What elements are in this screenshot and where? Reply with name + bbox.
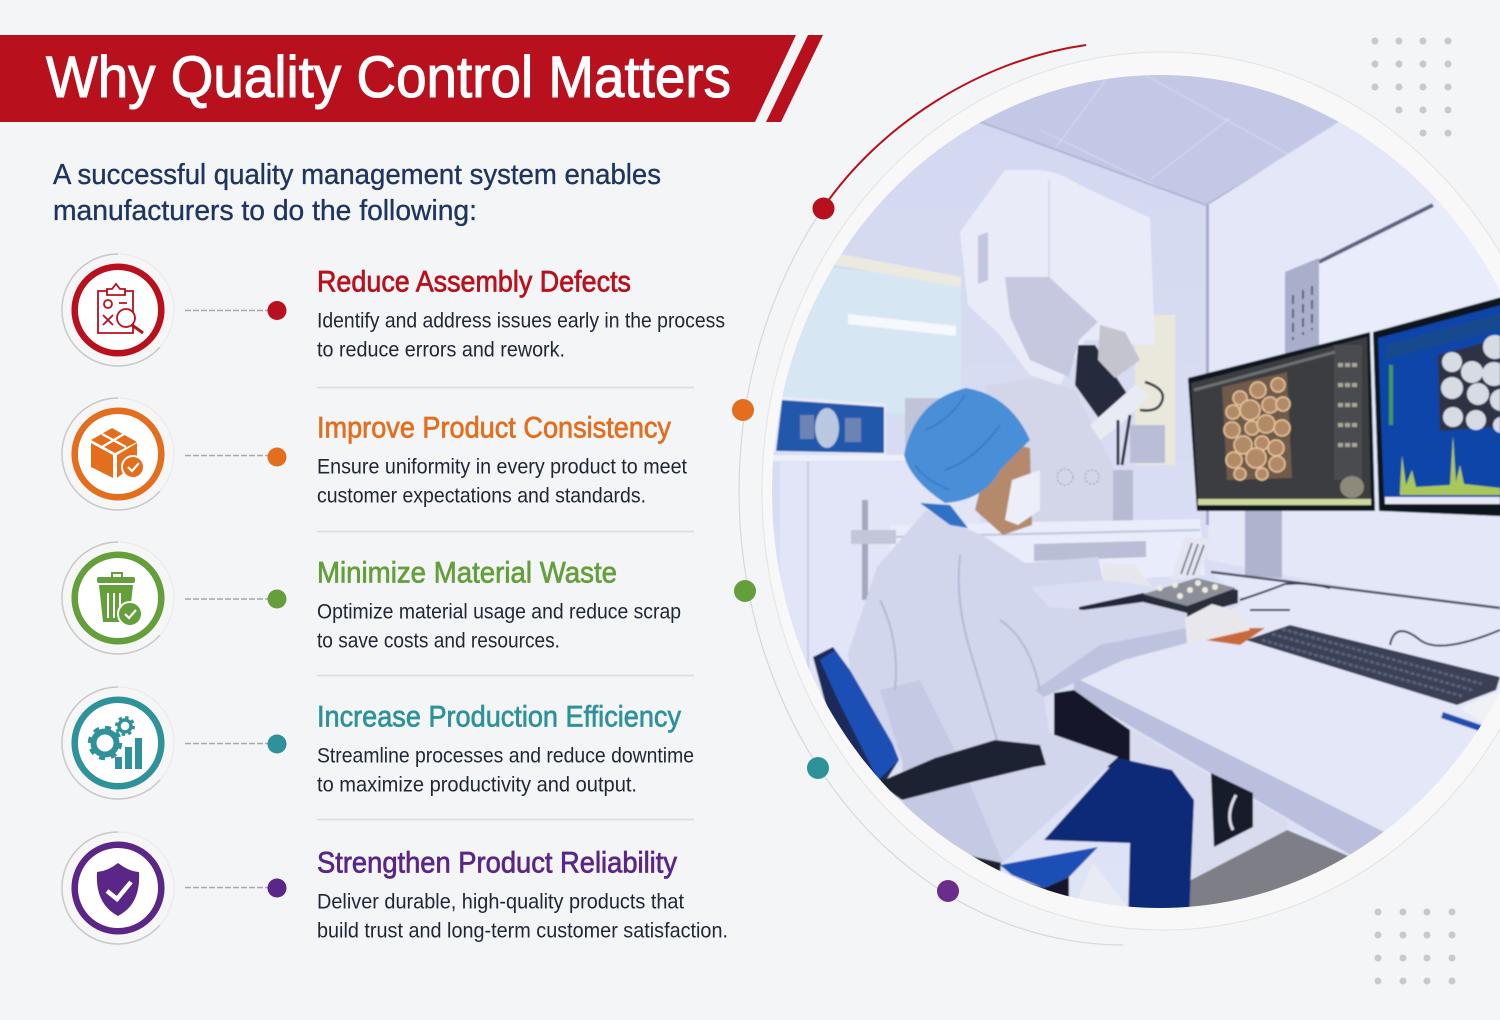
description: to maximize productivity and output. — [317, 774, 637, 796]
description — [317, 456, 687, 508]
description: Streamline processes and reduce downtime — [317, 744, 694, 768]
right wall — [1206, 118, 1500, 620]
heading: Improve Product Consistency — [317, 412, 671, 444]
item 4: increase production efficiency — [62, 687, 694, 799]
lab coat — [848, 510, 1187, 863]
intro text: manufacturers to do the following: — [53, 195, 477, 227]
technician — [848, 388, 1250, 920]
description — [317, 310, 725, 362]
header banner — [0, 35, 823, 122]
monitor: right screen — [1373, 292, 1500, 517]
connector — [185, 310, 270, 312]
timeline dot: green — [734, 580, 756, 602]
heading: Strengthen Product Reliability — [317, 846, 677, 880]
under-desk equipment — [1054, 690, 1351, 920]
heading: Reduce Assembly Defects — [317, 266, 631, 298]
armrest — [877, 740, 1046, 800]
tray and small keyboard — [1079, 578, 1265, 645]
red accent arc — [823, 45, 1086, 208]
trousers — [1044, 758, 1194, 920]
description: Optimize material usage and reduce scrap — [317, 600, 681, 624]
connector — [185, 742, 270, 744]
dot grid: bottom right — [1374, 908, 1456, 984]
icon: gears and bar chart — [62, 687, 174, 799]
desk — [1074, 572, 1500, 857]
connector — [185, 454, 270, 456]
item 2: improve product consistency — [62, 398, 687, 510]
photo: technician at electron microscope — [760, 60, 1500, 920]
icon: package with check — [62, 398, 174, 510]
microscope — [960, 170, 1163, 522]
description — [317, 890, 728, 942]
description — [317, 744, 694, 796]
item 5: strengthen product reliability — [62, 832, 728, 944]
intro text — [53, 159, 661, 227]
heading: Minimize Material Waste — [317, 556, 617, 590]
monitor stand — [1245, 505, 1282, 578]
heading: Increase Production Efficiency — [317, 700, 681, 734]
dot grid: top right — [1372, 38, 1452, 136]
description — [317, 600, 681, 652]
chair — [813, 647, 1098, 905]
decorative orbit rings — [739, 52, 1500, 945]
description: build trust and long-term customer satisfaction. — [317, 920, 728, 942]
monitor: left screen — [1188, 332, 1375, 511]
description: to save costs and resources. — [317, 630, 560, 652]
keyboard — [1246, 625, 1500, 705]
intro text: A successful quality management system enables — [53, 159, 661, 191]
description: to reduce errors and rework. — [317, 338, 565, 362]
description: Deliver durable, high-quality products that — [317, 890, 684, 914]
icon: trash bin with check — [62, 542, 174, 654]
face and mask — [975, 440, 1032, 535]
connector — [185, 886, 270, 888]
description: Ensure uniformity in every product to meet — [317, 456, 687, 478]
ceiling — [980, 75, 1338, 206]
scrub cap — [904, 388, 1030, 503]
window and poster — [770, 253, 1175, 465]
description: customer expectations and standards. — [317, 484, 646, 508]
item 3: minimize material waste — [62, 542, 681, 654]
description: Identify and address issues early in the process — [317, 310, 725, 332]
timeline dot: orange — [732, 399, 754, 421]
connector — [185, 598, 270, 600]
icon: shield with check — [62, 832, 174, 944]
back counter — [782, 462, 1208, 668]
timeline dot: teal — [807, 757, 829, 779]
item 1: reduce assembly defects — [62, 254, 725, 366]
icon: clipboard with magnifier — [62, 254, 174, 366]
gloves — [1104, 564, 1150, 586]
timeline dot: purple — [937, 880, 959, 902]
title: Why Quality Control Matters — [46, 45, 731, 110]
timeline dot: red — [812, 198, 834, 220]
